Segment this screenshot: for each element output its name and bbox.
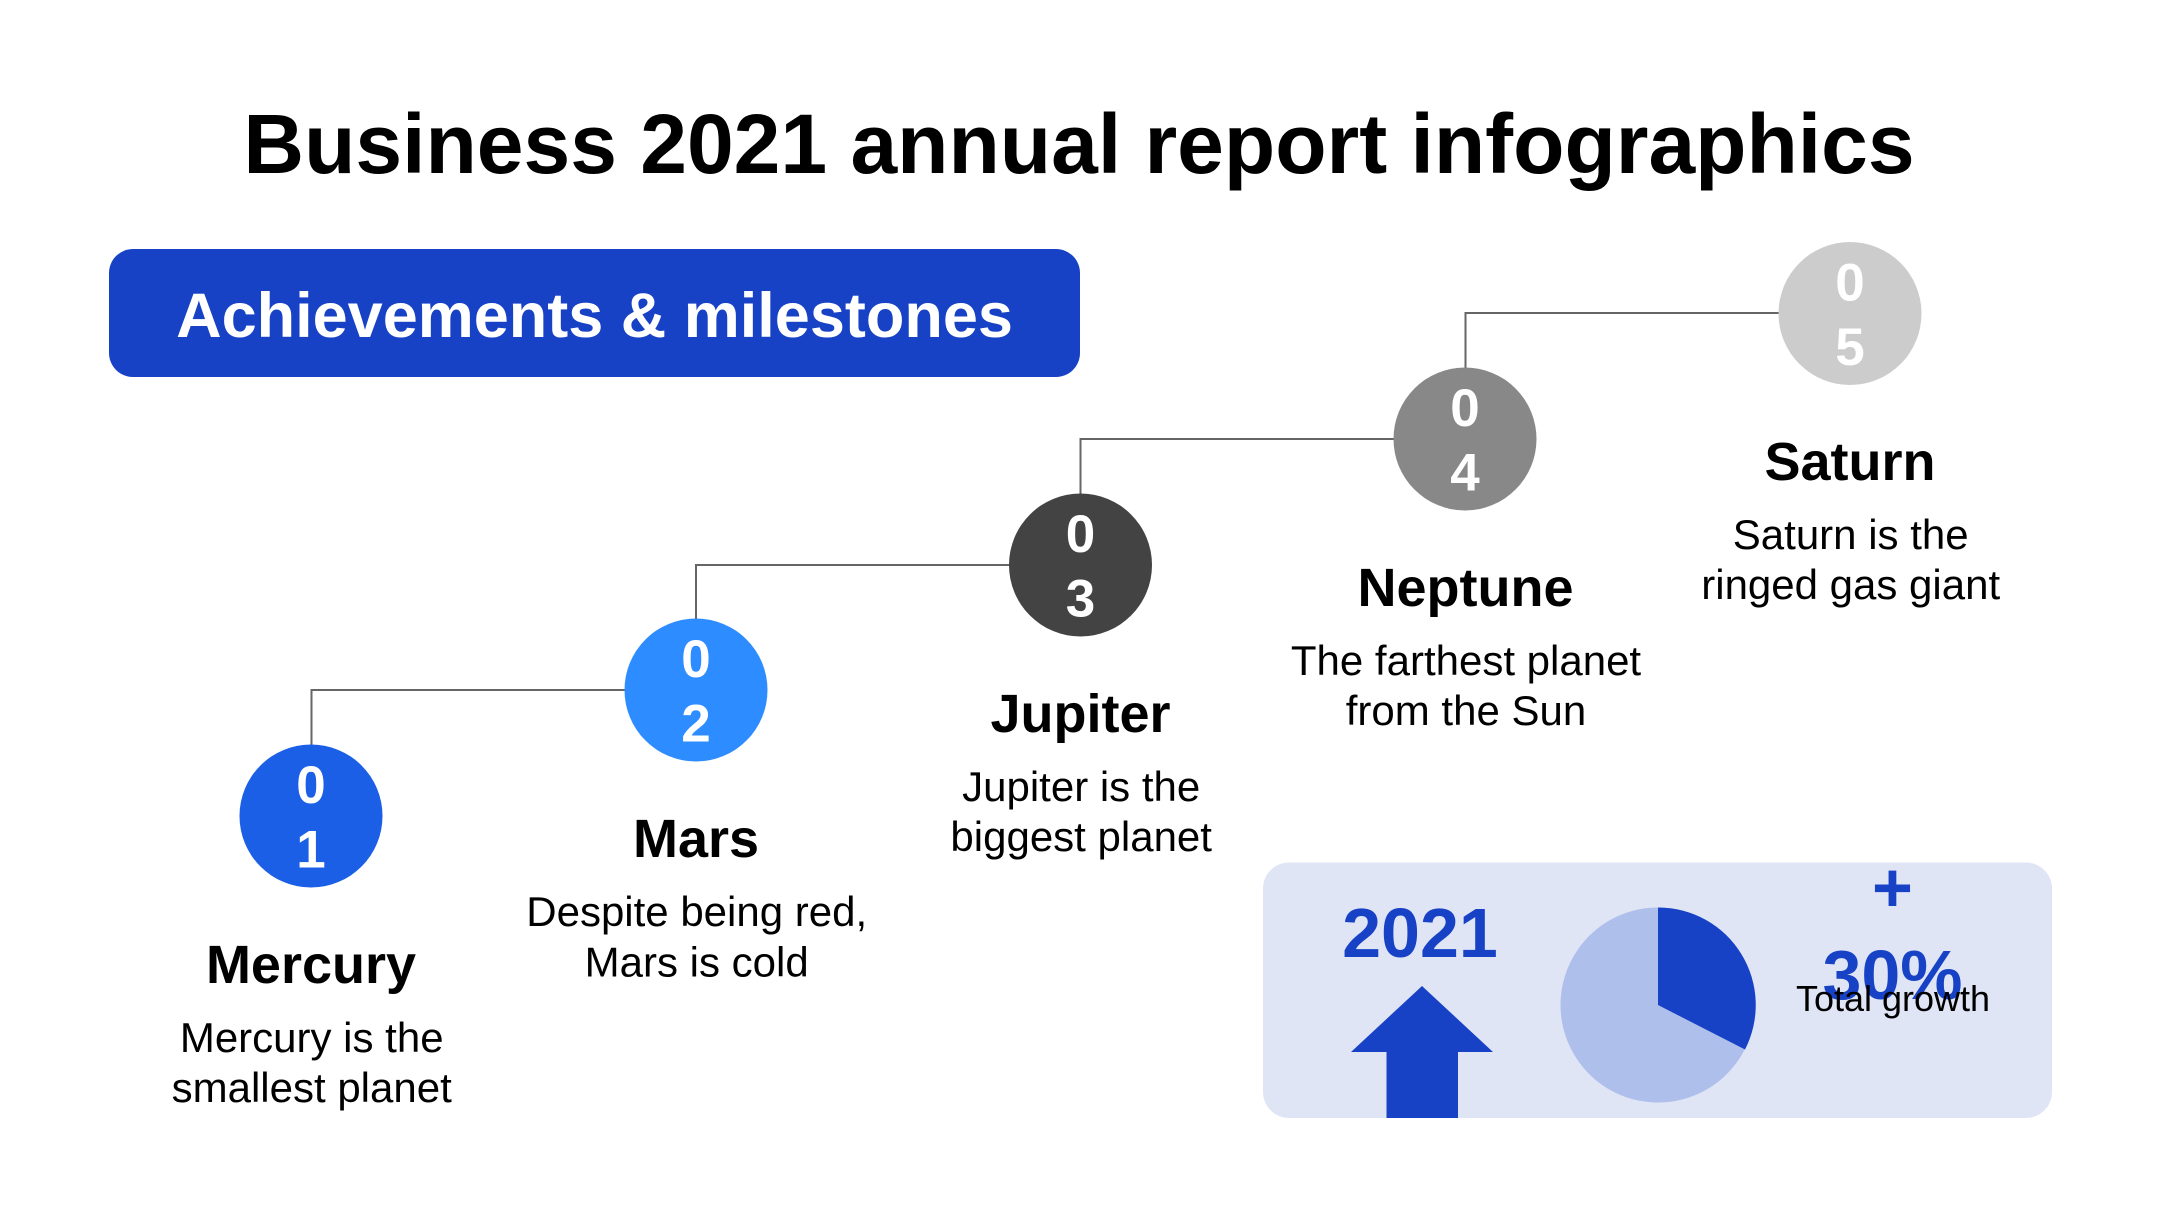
milestone 03: Jupiter: biggest planet	[950, 813, 1212, 860]
milestone 05: Saturn: 5	[1835, 318, 1865, 377]
milestone 02: Mars: 0	[681, 630, 711, 689]
icon: up arrow	[1351, 986, 1493, 1118]
panel: achievements badge: Achievements & milestones	[176, 281, 1013, 351]
milestone 03: Jupiter: 0	[1066, 505, 1095, 564]
milestone 05: Saturn: Saturn	[1764, 432, 1936, 492]
milestone 01: Mercury: Mercury	[206, 935, 416, 995]
panel: 2021 total growth	[1263, 848, 2052, 1118]
milestone 01: Mercury: Mercury is the	[180, 1014, 444, 1061]
milestone 01: Mercury: 1	[296, 820, 326, 880]
growth label: Total growth	[1796, 978, 1990, 1019]
milestone 01: Mercury: smallest planet	[172, 1064, 452, 1111]
connector: 02 to 03	[696, 565, 1080, 619]
milestone 03: Jupiter: Jupiter	[990, 684, 1171, 744]
growth figure: 30%	[1822, 936, 1963, 1014]
connector: 01 to 02	[312, 690, 696, 745]
milestone 05: Saturn	[1701, 242, 2000, 608]
milestone 01: Mercury: 0	[296, 756, 326, 815]
milestone 04: Neptune: The farthest planet	[1291, 637, 1641, 684]
connector: 03 to 04	[1080, 439, 1465, 494]
milestone 05: Saturn: 0	[1835, 254, 1865, 312]
title: Business 2021 annual report infographics	[243, 97, 1915, 191]
milestone 03: Jupiter	[950, 494, 1212, 860]
milestone 02: Mars: Despite being red,	[526, 888, 867, 935]
milestone 02: Mars	[526, 618, 867, 986]
milestone 04: Neptune: 0	[1450, 379, 1480, 438]
connector: 04 to 05	[1466, 313, 1850, 368]
milestone 03: Jupiter: Jupiter is the	[962, 763, 1200, 810]
milestone 03: Jupiter: 3	[1066, 570, 1095, 628]
milestone 04: Neptune: 4	[1450, 444, 1480, 502]
milestone 04: Neptune	[1291, 368, 1641, 734]
milestone 04: Neptune: Neptune	[1358, 558, 1574, 618]
pie chart	[1560, 907, 1756, 1102]
milestone 02: Mars: 2	[681, 694, 711, 754]
milestone 02: Mars: Mars	[633, 809, 759, 869]
growth figure: +	[1872, 848, 1913, 926]
panel: achievements badge	[109, 249, 1080, 377]
milestone 05: Saturn: Saturn is the	[1733, 511, 1969, 558]
milestone 01: Mercury	[172, 744, 452, 1111]
milestone 05: Saturn: ringed gas giant	[1701, 561, 2000, 608]
growth figure	[1822, 848, 1963, 1014]
milestone 04: Neptune: from the Sun	[1346, 687, 1586, 734]
year label: 2021	[1342, 894, 1498, 972]
milestone 02: Mars: Mars is cold	[585, 938, 809, 986]
